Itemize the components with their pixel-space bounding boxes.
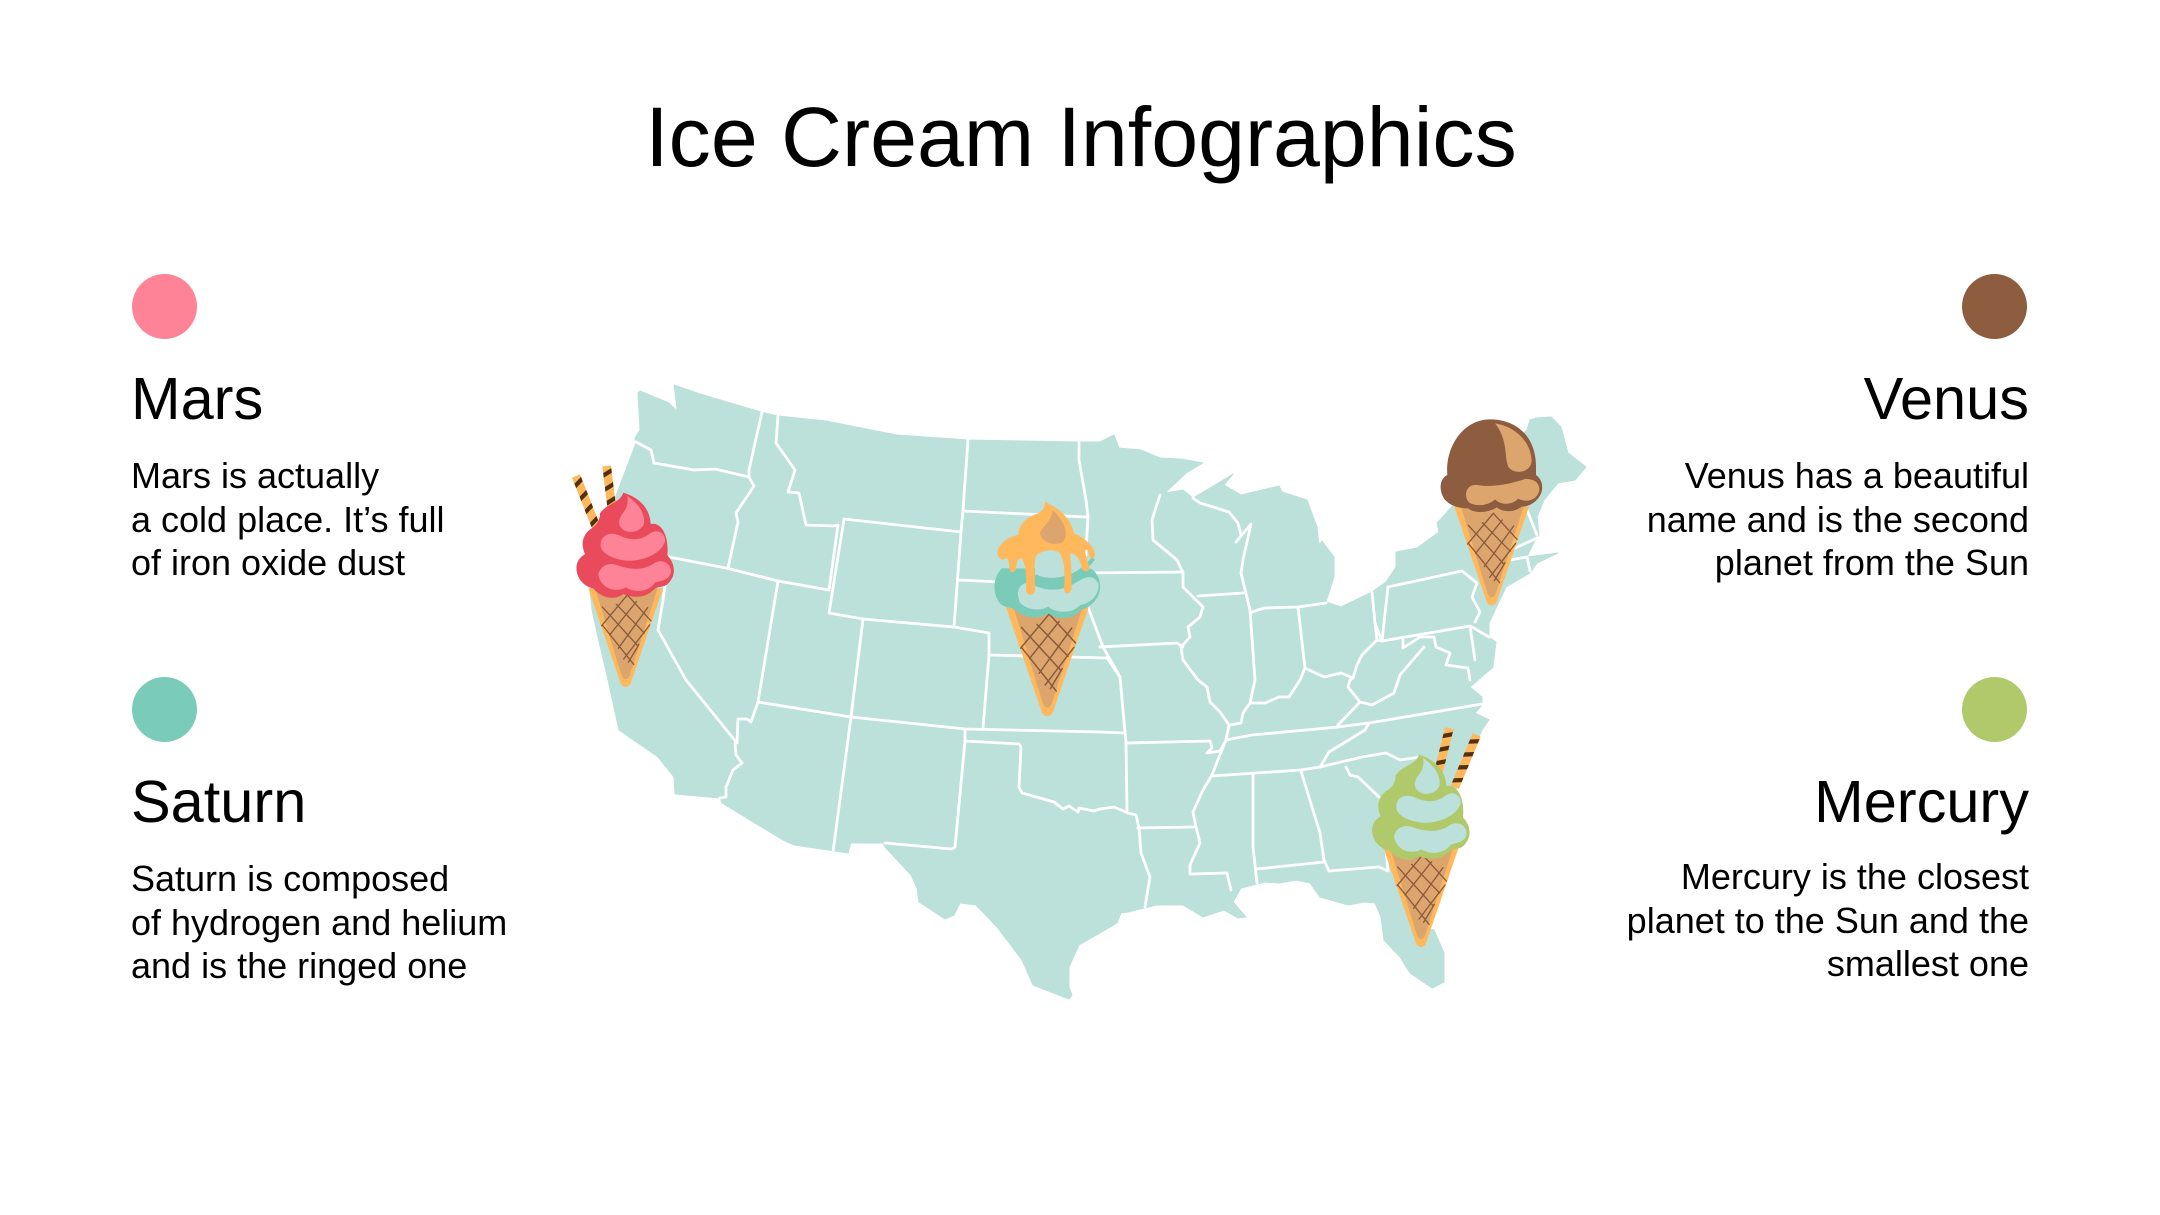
wafer sticks [572,465,618,530]
text: Mercury description: smallest one [1827,943,2029,984]
panel: Mercury [1627,677,2029,984]
map: country silhouette [590,385,1586,999]
scoop [1441,419,1542,512]
heading: Mars: Mars [131,365,263,432]
text: Venus description [1647,455,2029,583]
map: state borders [636,412,1537,907]
text: Mercury description [1627,856,2029,984]
text: Saturn description: of hydrogen and helium [131,902,507,942]
cone [1454,507,1529,605]
scoop [1372,755,1470,860]
mint scoop [995,553,1100,618]
icon: Saturn ice cream (mint with caramel) [995,502,1100,716]
text: Mars description [131,455,445,583]
panel: Venus [1647,274,2029,583]
text: Mars description: of iron oxide dust [131,542,405,583]
text: Saturn description: and is the ringed one [131,945,467,986]
panel: Mars [131,274,445,583]
heading: Saturn: Saturn [131,768,306,835]
cone [1006,607,1089,716]
title: Ice Cream Infographics [645,90,1517,184]
text: Mercury description: Mercury is the closest [1681,856,2029,897]
icon: Mars ice cream (red) [572,465,674,687]
icon: Venus ice cream (chocolate) [1441,419,1542,605]
wafer sticks [1431,727,1481,789]
map: United States [590,385,1586,999]
cone [588,588,663,687]
icon: Mercury ice cream (green) [1372,727,1481,947]
text: Venus description: Venus has a beautiful [1685,455,2029,496]
text: Venus description: name and is the second [1647,498,2029,540]
cone [1384,848,1458,947]
icon: Saturn colour dot [132,677,197,742]
icon: Mars colour dot [132,274,197,339]
text: Mars description: a cold place. It’s full [131,498,445,540]
text: Venus description: planet from the Sun [1715,542,2029,583]
caramel topping [997,502,1095,595]
heading: Mercury: Mercury [1814,768,2029,835]
heading: Venus: Venus [1864,365,2029,432]
scoop [576,493,674,598]
panel: Saturn [131,677,507,986]
icon: Mercury colour dot [1962,677,2027,742]
text: Saturn description [131,858,507,986]
text: Saturn description: Saturn is composed [131,858,449,899]
text: Mars description: Mars is actually [131,455,379,496]
text: Mercury description: planet to the Sun and the [1627,900,2029,940]
icon: Venus colour dot [1962,274,2027,339]
